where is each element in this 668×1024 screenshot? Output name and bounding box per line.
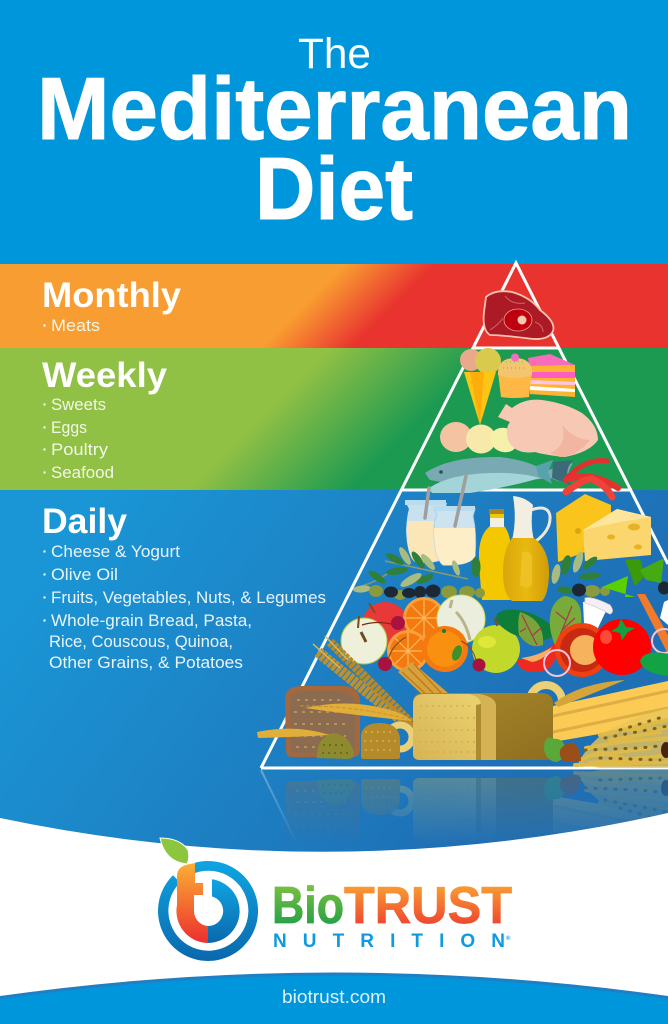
text block: monthly xyxy=(42,276,182,335)
panel: daily band xyxy=(0,490,668,870)
panel: weekly band xyxy=(0,348,668,490)
text block: weekly: Sweets xyxy=(51,396,106,414)
panel: white logo area xyxy=(0,813,668,1024)
icon: logo leaf xyxy=(160,838,189,864)
pyramid outline xyxy=(261,263,668,768)
text block: weekly: Weekly xyxy=(42,356,168,395)
text block: daily: Rice, Couscous, Quinoa, xyxy=(49,633,233,651)
icon: bread, grains and legumes xyxy=(257,636,668,768)
icon: cheese wedges xyxy=(556,494,651,562)
background: top blue panel xyxy=(0,0,668,264)
title: The xyxy=(298,30,371,78)
icon: fruits xyxy=(341,595,520,673)
title: Diet xyxy=(255,139,413,238)
text block: daily xyxy=(42,502,326,672)
text block: monthly: Meats xyxy=(51,317,100,335)
icon: fish xyxy=(425,457,573,493)
text block: daily: Other Grains, & Potatoes xyxy=(49,654,243,672)
icon: vegetables xyxy=(492,596,668,679)
icon: shrimp xyxy=(566,461,618,497)
text block: weekly: Eggs xyxy=(51,419,87,437)
icon: layer cake xyxy=(528,354,575,397)
panel: monthly band xyxy=(0,264,668,348)
icon: ice cream cone xyxy=(460,348,501,425)
logo: BioTRUST wordmark: ® xyxy=(506,935,511,942)
footer website link: biotrust.com xyxy=(282,987,386,1007)
logo: BioTRUST wordmark: TRUST xyxy=(344,877,512,935)
logo: BioTRUST wordmark: Bio xyxy=(272,877,344,935)
icon: olive branches and olives xyxy=(353,546,668,600)
text block: daily: Cheese & Yogurt xyxy=(51,543,180,561)
text block: weekly xyxy=(42,356,168,482)
text block: weekly: Poultry xyxy=(51,441,109,459)
reflection of foods on the surface xyxy=(260,770,668,836)
text block: monthly: Monthly xyxy=(42,276,182,315)
icon: olive oil bottle xyxy=(479,509,511,600)
icon: olive oil jug xyxy=(503,496,550,601)
text block: daily: Fruits, Vegetables, Nuts, & Legumes xyxy=(51,589,326,607)
text block: daily: Whole-grain Bread, Pasta, xyxy=(51,612,252,630)
footer curve: dark blue xyxy=(0,972,668,1024)
text block: daily: Olive Oil xyxy=(51,566,118,584)
text block: daily: Daily xyxy=(42,502,128,541)
icon: leafy greens and carrot xyxy=(602,558,668,654)
footer: bright blue xyxy=(0,976,668,1024)
icon: eggs xyxy=(440,422,521,456)
title: Mediterranean xyxy=(37,59,632,158)
icon: cupcake xyxy=(498,354,532,398)
title xyxy=(37,30,632,238)
text block: weekly: Seafood xyxy=(51,464,114,482)
logo: BioTRUST wordmark: NUTRITION xyxy=(273,931,505,952)
icon: roast chicken xyxy=(498,400,598,457)
logo: BioTRUST symbol xyxy=(158,838,258,961)
icon: yogurt jars xyxy=(405,476,476,565)
logo: BioTRUST wordmark xyxy=(272,877,512,952)
icon: meat steak xyxy=(484,291,553,339)
